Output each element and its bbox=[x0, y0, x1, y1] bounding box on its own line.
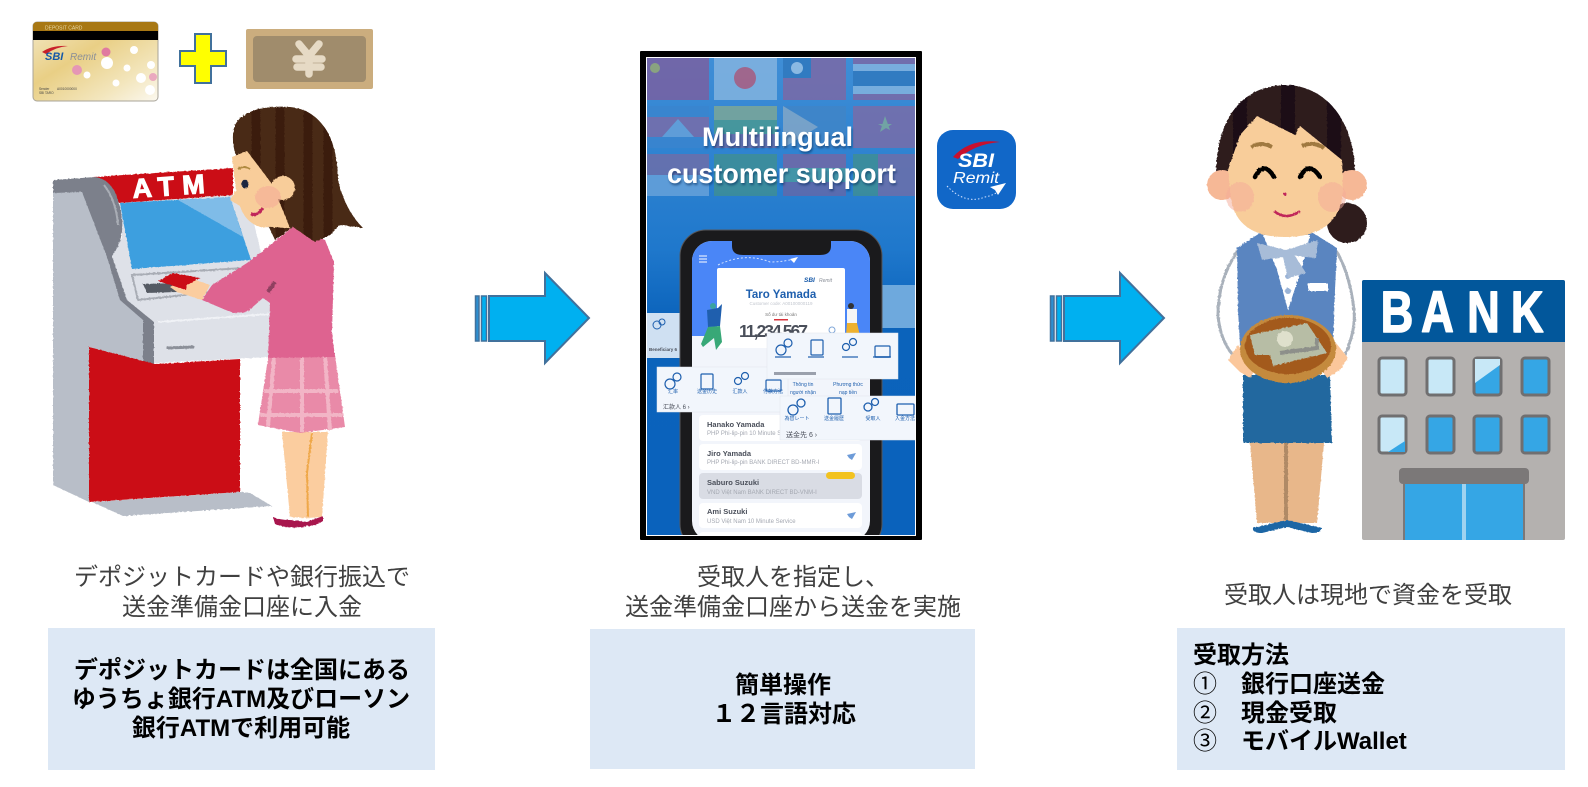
tray with money bbox=[1240, 315, 1336, 383]
figure: woman in yellow bbox=[846, 303, 860, 333]
heading: multilingual customer support: customer support bbox=[667, 158, 896, 189]
phone mockup bbox=[680, 230, 882, 552]
illustration: bank building bbox=[1362, 280, 1565, 540]
callout: receiving methods: ③ モバイルWallet bbox=[1193, 728, 1407, 755]
recipient menu labels: nạp tiền bbox=[839, 390, 857, 396]
recipient list: Ami Suzuki bbox=[707, 507, 747, 516]
heading: step 1: デポジットカードや銀行振込で bbox=[74, 564, 410, 591]
phone mockup: Số dư tài khoản bbox=[765, 312, 797, 317]
ATM sign label: ATM bbox=[131, 168, 214, 204]
popup: Japanese menu: 入金方法 bbox=[895, 415, 915, 422]
phone mockup: SBI bbox=[804, 277, 815, 284]
side panels bbox=[647, 285, 915, 358]
ATM machine bbox=[53, 168, 272, 516]
popup: Chinese menu: 付款方法 bbox=[763, 388, 783, 395]
recipient list: PHP Phi-lip-pin 10 Minute Service bbox=[707, 431, 798, 437]
flags background bbox=[647, 58, 915, 196]
phone mockup: 11,234,567 bbox=[739, 321, 808, 341]
heading: step 2: 受取人を指定し、 bbox=[697, 564, 889, 591]
panel: step 1 deposit bbox=[33, 22, 435, 770]
popup: Japanese menu: 送金履歴 bbox=[824, 415, 844, 422]
heading: multilingual customer support bbox=[667, 122, 896, 189]
illustration: woman using ATM bbox=[53, 100, 363, 528]
icon: SBI Remit app bbox=[937, 130, 1016, 209]
popup: Khmer menu bbox=[767, 333, 898, 379]
icon: SBI Remit deposit card: Sender bbox=[39, 87, 50, 91]
callout: step 2 note: 簡単操作 bbox=[735, 672, 831, 699]
recipient list: PHP Phi-lip-pin BANK DIRECT BD-MMR-I bbox=[707, 460, 820, 466]
callout: step 1 note bbox=[48, 628, 435, 770]
heading: step 1: 送金準備金口座に入金 bbox=[122, 594, 362, 621]
icon: SBI Remit deposit card: A0010000000 bbox=[57, 87, 77, 91]
popup: Chinese menu: 汇款人 6 › bbox=[663, 403, 690, 411]
arrow: step 1 to step 2 bbox=[476, 273, 589, 363]
icon: SBI Remit app: Remit bbox=[953, 170, 1000, 187]
popup: Japanese menu bbox=[780, 396, 920, 440]
recipient list bbox=[699, 415, 862, 535]
callout: step 2 note: １２言語対応 bbox=[712, 701, 856, 728]
popup: Japanese menu: 送金先 6 › bbox=[786, 430, 818, 439]
illustration: bank staff woman bbox=[1207, 80, 1367, 533]
icon: SBI Remit deposit card: SBI bbox=[45, 51, 64, 63]
app screenshot bbox=[640, 51, 922, 552]
woman figure bbox=[158, 100, 363, 528]
phone mockup: Customer code: A00100000119 bbox=[750, 301, 813, 306]
callout: receiving methods: ② 現金受取 bbox=[1193, 700, 1337, 727]
recipient list: VND Việt Nam BANK DIRECT BD-VNM-I bbox=[707, 490, 817, 496]
callout: step 1 note: 銀行ATMで利用可能 bbox=[132, 715, 350, 742]
heading: step 3: 受取人は現地で資金を受取 bbox=[1224, 582, 1512, 609]
icon: SBI Remit app: SBI bbox=[958, 151, 995, 172]
phone mockup: Taro Yamada bbox=[746, 289, 817, 301]
recipient list: Saburo Suzuki bbox=[707, 478, 759, 487]
icon: plus sign bbox=[180, 34, 226, 83]
recipient menu labels bbox=[790, 382, 863, 396]
recipient menu labels: Thông tin bbox=[793, 382, 814, 388]
popup: Japanese menu: 受取人 bbox=[865, 415, 881, 422]
recipient menu labels: Phương thức bbox=[833, 382, 863, 388]
phone mockup: Remit bbox=[819, 278, 833, 284]
arrow: step 2 to step 3 bbox=[1050, 273, 1164, 363]
callout: step 2 note bbox=[590, 629, 975, 769]
callout: receiving methods: 受取方法 bbox=[1193, 642, 1289, 669]
recipient list: Jiro Yamada bbox=[707, 449, 752, 458]
side panels: Beneficiary 6 bbox=[649, 347, 678, 352]
heading: multilingual customer support: Multilingual bbox=[702, 122, 853, 152]
popup: Chinese menu: 送金历史 bbox=[697, 388, 717, 395]
callout: receiving methods: ① 銀行口座送金 bbox=[1193, 671, 1385, 698]
callout: step 1 note: デポジットカードは全国にある bbox=[74, 657, 410, 684]
recipient list: USD Việt Nam 10 Minute Service bbox=[707, 519, 796, 525]
popup: Chinese menu: 汇款人 bbox=[732, 388, 748, 395]
recipient list: Hanako Yamada bbox=[707, 420, 765, 429]
illustration: bank building: BANK bbox=[1381, 281, 1544, 345]
popup: Japanese menu: 為替レート bbox=[784, 415, 810, 422]
callout: receiving methods bbox=[1177, 628, 1565, 770]
panel: step 2 app bbox=[590, 51, 1016, 769]
panel: step 3 receive bbox=[1177, 80, 1565, 770]
icon: yen banknote bbox=[246, 29, 373, 89]
figure: man in green bbox=[701, 303, 722, 350]
icon: SBI Remit deposit card: DEPOSIT CARD bbox=[45, 26, 83, 32]
popup: Chinese menu: 汇率 bbox=[668, 388, 678, 395]
callout: step 1 note: ゆうちょ銀行ATM及びローソン bbox=[72, 686, 410, 713]
popup: Chinese menu bbox=[657, 367, 788, 412]
icon: SBI Remit deposit card: Remit bbox=[70, 52, 97, 63]
icon: SBI Remit deposit card bbox=[33, 22, 158, 101]
heading: step 2: 送金準備金口座から送金を実施 bbox=[625, 594, 961, 621]
recipient menu labels: người nhận bbox=[790, 390, 816, 396]
icon: SBI Remit deposit card: SBI TARO bbox=[39, 91, 54, 95]
